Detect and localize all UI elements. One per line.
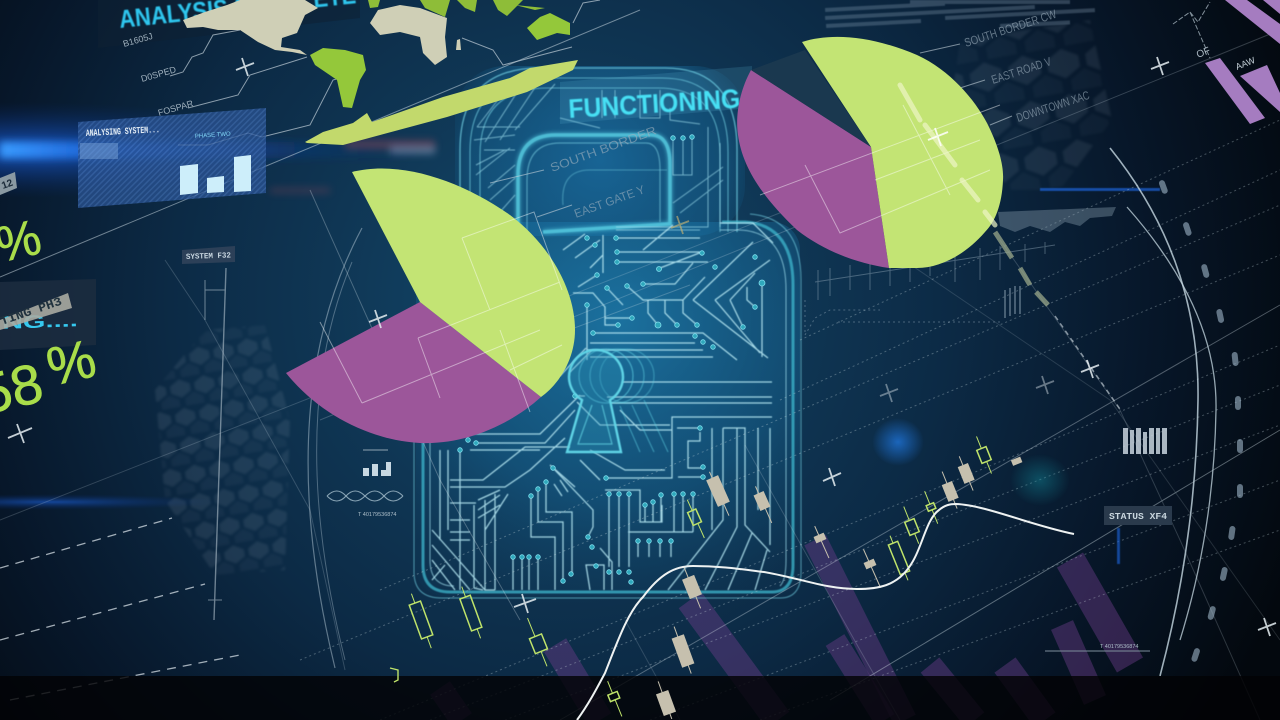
stat: 58 percent: [0, 328, 101, 426]
hexagon field: left: [155, 325, 290, 575]
panel: analysis complete header: [98, 0, 360, 48]
circuit traces: [432, 223, 773, 590]
label: south border lock: [490, 123, 659, 183]
shackle: [460, 68, 737, 232]
mini chart: lower left of lock: [363, 450, 391, 476]
pie slice: purple: [737, 70, 889, 268]
lock: [414, 66, 801, 598]
dashed lines: right diagonal grid: [300, 120, 1280, 720]
panel: analysing system: [78, 108, 266, 208]
waveform strip: [998, 207, 1116, 232]
panel: status lower left: [0, 279, 96, 350]
panel subtitle: PHASE TWO: [195, 131, 231, 140]
vertical gauge: [205, 268, 226, 620]
north america: [183, 0, 318, 55]
shackle glow: [455, 66, 745, 236]
candlesticks: beige: [652, 454, 1022, 720]
pie overlay grid: [320, 212, 562, 412]
code text block: top right: [825, 0, 1095, 28]
pie chart: right: [737, 37, 1003, 268]
label: south border: [920, 7, 1059, 53]
sticker: 12: 12: [0, 178, 15, 192]
circuit nodes: [458, 135, 765, 584]
candlesticks: green: [390, 435, 996, 718]
label: east gate: EAST GATE Y: [572, 182, 647, 221]
lens flare: lower left: [0, 494, 220, 510]
label: south border lock: SOUTH BORDER: [548, 123, 659, 175]
pie slice: green: [802, 37, 1003, 268]
tag: status xf4: STATUS XF4: [1109, 512, 1168, 522]
keyhole: [567, 349, 668, 452]
label: B1605J: B1605J: [122, 31, 154, 49]
lock body glow: [416, 222, 800, 596]
pie overlay grid: [760, 105, 1000, 233]
route lines: [170, 0, 600, 145]
pie chart: left: [286, 169, 575, 443]
label: D0SPED: D0SPED: [140, 64, 178, 84]
label: east road: [960, 54, 1053, 88]
lens flare: right streak: [1040, 188, 1160, 191]
label: downtown: [990, 88, 1091, 125]
heading: functioning: [560, 66, 752, 124]
label: east gate: [537, 182, 647, 221]
road labels: [490, 7, 1091, 221]
pie slice: green: [352, 169, 575, 397]
bar chart: [180, 155, 251, 195]
serial text: lower right: T 40179536874: [1100, 644, 1138, 650]
madagascar: [456, 39, 461, 50]
label: OF: OF: [1195, 45, 1212, 61]
blue blob: [872, 418, 924, 466]
data traces: [805, 242, 1055, 335]
tag: system f32: [182, 246, 235, 264]
scale beads: [1158, 179, 1243, 663]
label: east road: EAST ROAD V: [990, 54, 1053, 87]
tag: system f32: SYSTEM F32: [186, 251, 231, 262]
antarctica strip: [305, 60, 578, 145]
tag: status xf4: [1104, 506, 1172, 525]
world map: [183, 0, 578, 145]
heading: functioning: FUNCTIONING: [568, 84, 741, 124]
barcode block: [1123, 428, 1167, 454]
dotted axis continuation: [1055, 316, 1122, 412]
africa: [370, 5, 447, 65]
south america: [310, 48, 366, 108]
lock frame: [414, 214, 801, 598]
sticker: 12: [0, 172, 17, 195]
mini line chart: top right: [1173, 2, 1210, 58]
status beam: [1117, 528, 1120, 564]
small serial text: T 40179536874: [358, 512, 396, 518]
label: south border: SOUTH BORDER CW: [963, 7, 1059, 50]
label: AAW: AAW: [1234, 55, 1257, 72]
trend curve: [577, 504, 1074, 720]
panel title: ANALYSING SYSTEM...: [86, 124, 160, 139]
pie wedge: background: [751, 50, 871, 147]
arcs: [308, 148, 1216, 676]
australia: [527, 13, 570, 40]
label: downtown: DOWNTOWN XAC: [1015, 88, 1091, 125]
panel: status lower left: TING PH3: [0, 295, 64, 329]
dna wave: [327, 491, 403, 501]
teal blob: [1010, 454, 1070, 506]
crosshair markers: [8, 57, 1276, 636]
purple bars: bottom chart: [440, 540, 1130, 720]
stat: 58 percent: %: [41, 328, 101, 398]
hexagon field: upper right: [950, 20, 1112, 190]
label: FOSPAR: FOSPAR: [157, 98, 195, 118]
dashed highlight continuation: [995, 232, 1048, 305]
legend block: [80, 143, 118, 159]
bottom band: [0, 676, 1280, 720]
purple bars: top right: [1205, 0, 1280, 124]
lens flare: upper left: [0, 102, 435, 198]
pie slice: purple: [286, 302, 541, 443]
dashed highlight: [900, 85, 995, 225]
serial text: lower right: [1045, 644, 1150, 651]
europe and asia pieces: [368, 0, 545, 17]
dashed lines: lower left: [0, 518, 240, 700]
